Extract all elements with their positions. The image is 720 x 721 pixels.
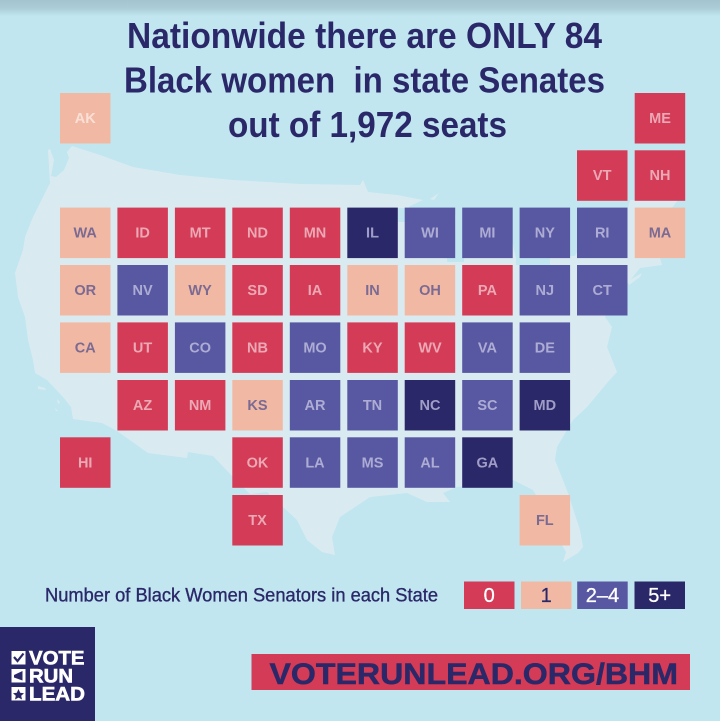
logo wordmark: VOTE [29, 648, 84, 670]
tile: WA: WA [74, 226, 97, 242]
tile: WY [175, 265, 225, 316]
legend swatch: 0 [464, 582, 514, 609]
tile: AL [405, 437, 455, 488]
tile: WV [405, 322, 455, 373]
tile: GA: GA [477, 455, 499, 471]
tile: IA: IA [308, 283, 323, 299]
tile: OH [405, 265, 455, 316]
tile: KY: KY [362, 340, 383, 356]
title: Nationwide there are ONLY 84 [127, 15, 602, 56]
tile: LA: LA [305, 455, 325, 471]
title [124, 15, 605, 145]
tile: OR [60, 265, 110, 316]
tile: MO: MO [303, 340, 327, 356]
tile: OK: OK [247, 455, 269, 471]
tile: TX: TX [248, 513, 267, 529]
logo wordmark [29, 648, 85, 706]
tile: PA [462, 265, 513, 316]
tile: MD [520, 380, 570, 430]
tile: NJ: NJ [536, 283, 554, 299]
tile: VT: VT [593, 168, 612, 184]
tile: MA [635, 208, 685, 258]
tile: ID [117, 208, 168, 258]
tile: NY: NY [535, 226, 555, 242]
tile: TN [347, 380, 398, 430]
legend swatch: 1: 1 [541, 585, 552, 607]
tile: SC: SC [477, 398, 498, 414]
legend swatch: 0: 0 [484, 585, 495, 607]
tile: AZ: AZ [133, 398, 152, 414]
tile: KY [347, 322, 398, 373]
tile: NJ [520, 265, 570, 316]
logo wordmark: RUN [29, 666, 73, 688]
tile: MT [175, 208, 225, 258]
legend swatch: 2-4 [577, 582, 628, 609]
tile: AL: AL [420, 455, 440, 471]
tile: ID: ID [135, 226, 150, 242]
tile: GA [462, 437, 513, 488]
tile: PA: PA [478, 283, 497, 299]
tile: NV: NV [133, 283, 153, 299]
tile: NB [232, 322, 283, 373]
tile: VA [462, 322, 513, 373]
tile: MT: MT [190, 226, 211, 242]
legend swatch: 5+: 5+ [648, 585, 671, 607]
tile: ND [232, 208, 283, 258]
tile: WY: WY [188, 283, 212, 299]
tile: CT: CT [593, 283, 612, 299]
tile: TN: TN [363, 398, 382, 414]
icon: star box [12, 687, 26, 700]
tile: KS [232, 380, 283, 430]
tile: IN: IN [365, 283, 380, 299]
title: Black women in state Senates [124, 60, 605, 100]
tile: SD: SD [247, 283, 268, 299]
tile: NC: NC [420, 398, 441, 414]
tile: IN [347, 265, 398, 316]
background map of the United States [15, 146, 678, 562]
logo: Vote Run Lead [0, 627, 95, 721]
tile: NH: NH [650, 168, 670, 184]
tile: MS [347, 437, 398, 488]
tile: MI [462, 208, 513, 258]
legend swatch: 2-4: 2–4 [586, 585, 619, 607]
tile: MN: MN [304, 226, 326, 242]
tile: MO [290, 322, 340, 373]
tile: RI: RI [595, 226, 609, 242]
tile: CA [60, 322, 110, 373]
tile: UT: UT [133, 340, 152, 356]
tile: CO: CO [189, 340, 211, 356]
tile: FL [520, 495, 570, 546]
tile: NB: NB [247, 340, 268, 356]
legend [45, 582, 685, 609]
state tile grid [60, 93, 685, 546]
tile: NV [117, 265, 168, 316]
tile: ME [635, 93, 685, 144]
icon: megaphone box [12, 669, 26, 682]
title: out of 1,972 seats [228, 104, 507, 145]
tile: VT [577, 150, 628, 201]
tile: SC [462, 380, 513, 430]
tile: HI [60, 437, 110, 488]
tile: MI: MI [479, 226, 495, 242]
tile: SD [232, 265, 283, 316]
tile: NM [175, 380, 225, 430]
tile: CA: CA [75, 340, 96, 356]
tile: OR: OR [74, 283, 97, 299]
tile: OK [232, 437, 283, 488]
tile: OH: OH [419, 283, 441, 299]
tile: UT [117, 322, 168, 373]
tile: AR: AR [305, 398, 326, 414]
tile: CT [577, 265, 628, 316]
legend label: Number of Black Women Senators in each State [45, 586, 438, 606]
tile: WA [60, 208, 110, 258]
tile: RI [577, 208, 628, 258]
tile: NM: NM [189, 398, 211, 414]
tile: ME: ME [649, 111, 671, 127]
logo wordmark: LEAD [29, 684, 85, 706]
tile: HI: HI [78, 455, 92, 471]
tile: AK [60, 93, 110, 144]
icon: check box [12, 651, 26, 664]
tile: DE: DE [535, 340, 555, 356]
tile: AZ [117, 380, 168, 430]
tile: WV: WV [418, 340, 442, 356]
tile: NY [520, 208, 570, 258]
tile: NC [405, 380, 455, 430]
tile: KS: KS [247, 398, 268, 414]
tile: MS: MS [362, 455, 384, 471]
tile: DE [520, 322, 570, 373]
tile: AR [290, 380, 340, 430]
tile: MA: MA [649, 226, 672, 242]
tile: WI [405, 208, 455, 258]
tile: LA [290, 437, 340, 488]
tile: IA [290, 265, 340, 316]
tile: FL: FL [536, 513, 554, 529]
tile: CO [175, 322, 225, 373]
tile: MD: MD [534, 398, 556, 414]
tile: ND: ND [247, 226, 268, 242]
tile: TX [232, 495, 283, 546]
tile: MN [290, 208, 340, 258]
tile: WI: WI [421, 226, 439, 242]
legend swatch: 1 [521, 582, 572, 609]
url banner: VOTERUNLEAD.ORG/BHM [270, 658, 678, 691]
tile: AK: AK [75, 111, 96, 127]
tile: VA: VA [478, 340, 497, 356]
tile: NH [635, 150, 685, 201]
tile: IL [347, 208, 398, 258]
legend swatch: 5+ [634, 582, 685, 609]
tile: IL: IL [366, 226, 379, 242]
